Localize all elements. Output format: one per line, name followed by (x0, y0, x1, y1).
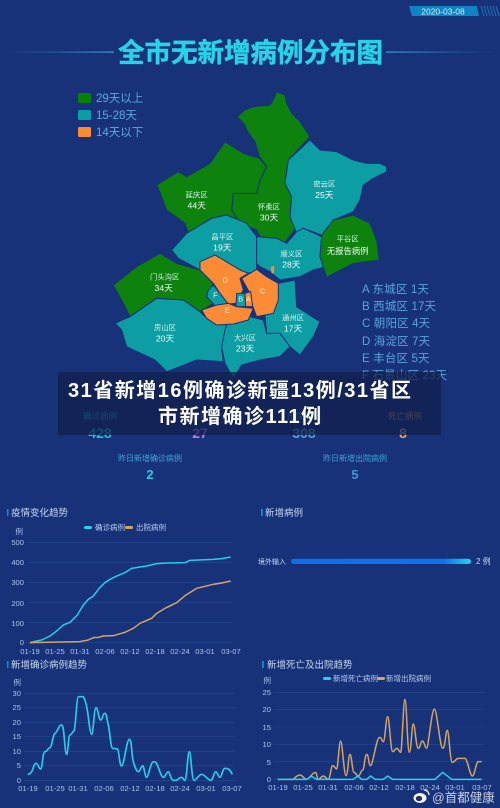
axis: deaths and discharges: 03-01 (445, 783, 465, 792)
district labels: E (225, 306, 230, 315)
district labels: 房山区 (154, 323, 176, 332)
district labels: 44天 (188, 201, 206, 211)
summary stats: 428 (88, 425, 112, 441)
axis: new confirmed trend: 02-24 (170, 784, 190, 793)
district labels: 20天 (156, 333, 174, 343)
district labels: 怀柔区 (258, 202, 280, 211)
axis: epidemic trend: 01-31 (70, 647, 90, 656)
district: Yanqing (157, 142, 267, 233)
district labels: 平谷区 (337, 235, 359, 244)
district list: C 朝阳区 4天 (362, 317, 431, 330)
axis: new confirmed trend: 03-01 (196, 784, 216, 793)
district labels: 无报告病例 (327, 246, 368, 256)
district labels: 28天 (282, 260, 301, 270)
district labels: B (238, 294, 243, 303)
axis: deaths and discharges (263, 675, 492, 792)
axis: epidemic trend: 01-25 (45, 647, 65, 656)
date tag (409, 6, 499, 16)
axis: new confirmed trend: 02-18 (145, 784, 165, 793)
axis: epidemic trend: 03-01 (195, 647, 215, 656)
district: Chaoyang C (242, 269, 278, 317)
legend: deaths and discharges: 新增出院病例 (386, 673, 431, 683)
legend: deaths and discharges: 新增死亡病例 (333, 673, 378, 683)
axis: new confirmed trend: 25 (13, 703, 21, 712)
summary stats: 出院病例 (287, 411, 321, 421)
axis: new confirmed trend (13, 677, 242, 793)
axis: epidemic trend (11, 526, 241, 656)
district: Shunyi exclave (271, 266, 274, 273)
heading: epidemic trend: 疫情变化趋势 (11, 507, 69, 519)
axis: epidemic trend: 02-18 (145, 647, 165, 656)
district: Haidian D (200, 255, 248, 304)
axis: new confirmed trend: 15 (13, 732, 21, 741)
summary stats: 死亡病例 (388, 411, 422, 421)
summary stats: 27 (192, 425, 208, 441)
district labels: 门头沟区 (150, 273, 179, 282)
axis: epidemic trend: 0 (20, 638, 24, 647)
axis: deaths and discharges: 01-31 (318, 783, 338, 792)
icon: weibo (414, 790, 429, 803)
axis: epidemic trend: 300 (11, 578, 24, 587)
district labels: A (246, 294, 251, 303)
axis: new confirmed trend: 例 (13, 677, 21, 687)
headline banner: 31省新增16例确诊新疆13例/31省区 (68, 379, 413, 402)
district map (113, 92, 387, 378)
district list: E 丰台区 5天 (362, 351, 430, 365)
district labels: 密云区 (313, 180, 335, 189)
summary stats: 昨日新增确诊病例 (118, 453, 182, 463)
line: new deaths (278, 772, 482, 779)
axis: new confirmed trend: 01-31 (68, 784, 88, 793)
axis: new confirmed trend: 5 (17, 761, 21, 770)
district: Dongcheng A (245, 292, 253, 307)
axis: epidemic trend: 02-24 (170, 647, 190, 656)
district: Fengtai E (202, 303, 253, 325)
axis: deaths and discharges: 02-24 (420, 783, 440, 792)
panel: new cases (258, 507, 491, 566)
district: Tongzhou (265, 280, 320, 355)
district: Daxing (222, 317, 290, 378)
axis: epidemic trend: 02-06 (95, 647, 115, 656)
district: Mentougou (113, 253, 213, 317)
axis: new confirmed trend: 30 (13, 689, 21, 698)
legend: epidemic trend: 确诊病例 (95, 522, 125, 532)
axis: deaths and discharges: 25 (263, 688, 271, 697)
axis: new confirmed trend: 02-12 (120, 784, 140, 793)
district: Fangshan (115, 298, 228, 372)
axis: new confirmed trend: 20 (13, 718, 21, 727)
district: Miyun (285, 140, 387, 235)
axis: deaths and discharges: 02-12 (369, 783, 389, 792)
summary stats: 确诊病例 (83, 411, 117, 421)
watermark: @首都健康 (432, 790, 495, 805)
panel: deaths and discharges trend (262, 659, 492, 792)
district: Shunyi (257, 228, 327, 280)
date tag: 2020-03-08 (421, 6, 465, 16)
district labels: 17天 (284, 323, 302, 333)
district list: A 东城区 1天 (362, 283, 429, 296)
axis: deaths and discharges: 20 (263, 705, 271, 714)
district labels: 昌平区 (211, 232, 233, 241)
map legend: 14天以下 (96, 126, 143, 139)
axis: new confirmed trend: 0 (17, 776, 21, 785)
axis: new confirmed trend: 03-07 (222, 784, 242, 793)
summary stats: 308 (292, 425, 316, 441)
line: discharged cases (30, 581, 231, 643)
line: confirmed cases (30, 557, 231, 643)
district: Shijingshan F (207, 285, 228, 306)
axis: new confirmed trend: 01-19 (18, 784, 38, 793)
district labels: 大兴区 (234, 334, 256, 343)
district labels (150, 180, 368, 354)
axis: deaths and discharges: 15 (263, 723, 271, 732)
map legend: 15-28天 (96, 110, 137, 122)
district: Changping (172, 215, 257, 273)
district: Xicheng B (236, 293, 246, 307)
district: Huairou (232, 92, 310, 245)
axis: deaths and discharges: 01-19 (268, 783, 288, 792)
axis: deaths and discharges: 02-06 (344, 783, 364, 792)
district: Pinggu (320, 215, 379, 277)
heading: new confirmed trend: 新增确诊病例趋势 (11, 659, 88, 671)
axis: epidemic trend: 02-12 (120, 647, 140, 656)
district labels: 34天 (155, 283, 173, 293)
axis: epidemic trend: 400 (11, 558, 24, 567)
axis: deaths and discharges: 03-07 (472, 783, 492, 792)
axis: deaths and discharges: 5 (267, 758, 271, 767)
summary stats: 现有病例 (183, 411, 217, 421)
legend: epidemic trend (84, 522, 166, 532)
map legend (78, 92, 143, 139)
axis: deaths and discharges: 01-25 (293, 783, 313, 792)
headline banner (58, 372, 441, 435)
district labels: 19天 (213, 243, 232, 253)
legend: epidemic trend: 出院病例 (136, 522, 166, 532)
line: new confirmed (28, 697, 232, 780)
axis: new confirmed trend: 01-25 (45, 784, 65, 793)
district shapes (113, 92, 387, 378)
heading: deaths and discharges: 新增死亡及出院趋势 (267, 659, 353, 671)
district list: B 西城区 17天 (362, 300, 437, 313)
summary stats: 2 (146, 467, 154, 482)
bar: imported cases (258, 556, 491, 566)
headline banner: 市新增确诊111例 (158, 404, 323, 428)
district list: D 海淀区 7天 (362, 334, 431, 348)
district labels: 23天 (236, 344, 254, 354)
bar: imported cases: 2 例 (476, 556, 491, 566)
line: new discharged (278, 699, 482, 779)
panel: epidemic trend (7, 507, 241, 656)
title: 全市无新增病例分布图 (118, 38, 383, 68)
axis: deaths and discharges: 10 (263, 740, 271, 749)
summary stats: 5 (351, 467, 359, 482)
axis: epidemic trend: 01-19 (20, 647, 40, 656)
bar: imported cases: 境外输入 (258, 557, 286, 566)
axis: epidemic trend: 例 (15, 526, 23, 536)
axis: epidemic trend: 03-07 (221, 647, 241, 656)
district list (362, 283, 448, 382)
map legend: 29天以上 (96, 92, 143, 105)
axis: epidemic trend: 500 (11, 538, 24, 547)
district labels: 延庆区 (186, 190, 208, 199)
district labels: 25天 (315, 190, 334, 200)
district labels: F (213, 291, 218, 300)
axis: deaths and discharges: 例 (263, 675, 271, 685)
district labels: 30天 (260, 212, 278, 222)
district list: F 石景山区 23天 (362, 369, 448, 382)
axis: deaths and discharges: 0 (267, 775, 271, 784)
district labels: 通州区 (282, 313, 304, 322)
summary stats: 昨日新增出院病例 (323, 453, 387, 463)
summary stats: 8 (399, 425, 407, 441)
axis: new confirmed trend: 10 (13, 747, 21, 756)
district labels: 顺义区 (280, 250, 302, 259)
district labels: D (223, 276, 228, 285)
axis: epidemic trend: 100 (11, 619, 24, 628)
heading: new cases: 新增病例 (265, 507, 303, 519)
axis: new confirmed trend: 02-06 (94, 784, 114, 793)
panel: new confirmed trend (7, 659, 242, 793)
axis: epidemic trend: 200 (11, 599, 24, 608)
axis: deaths and discharges: 02-18 (395, 783, 415, 792)
summary stats (83, 411, 422, 482)
district labels: C (260, 287, 266, 296)
legend: deaths and discharges (323, 673, 431, 683)
